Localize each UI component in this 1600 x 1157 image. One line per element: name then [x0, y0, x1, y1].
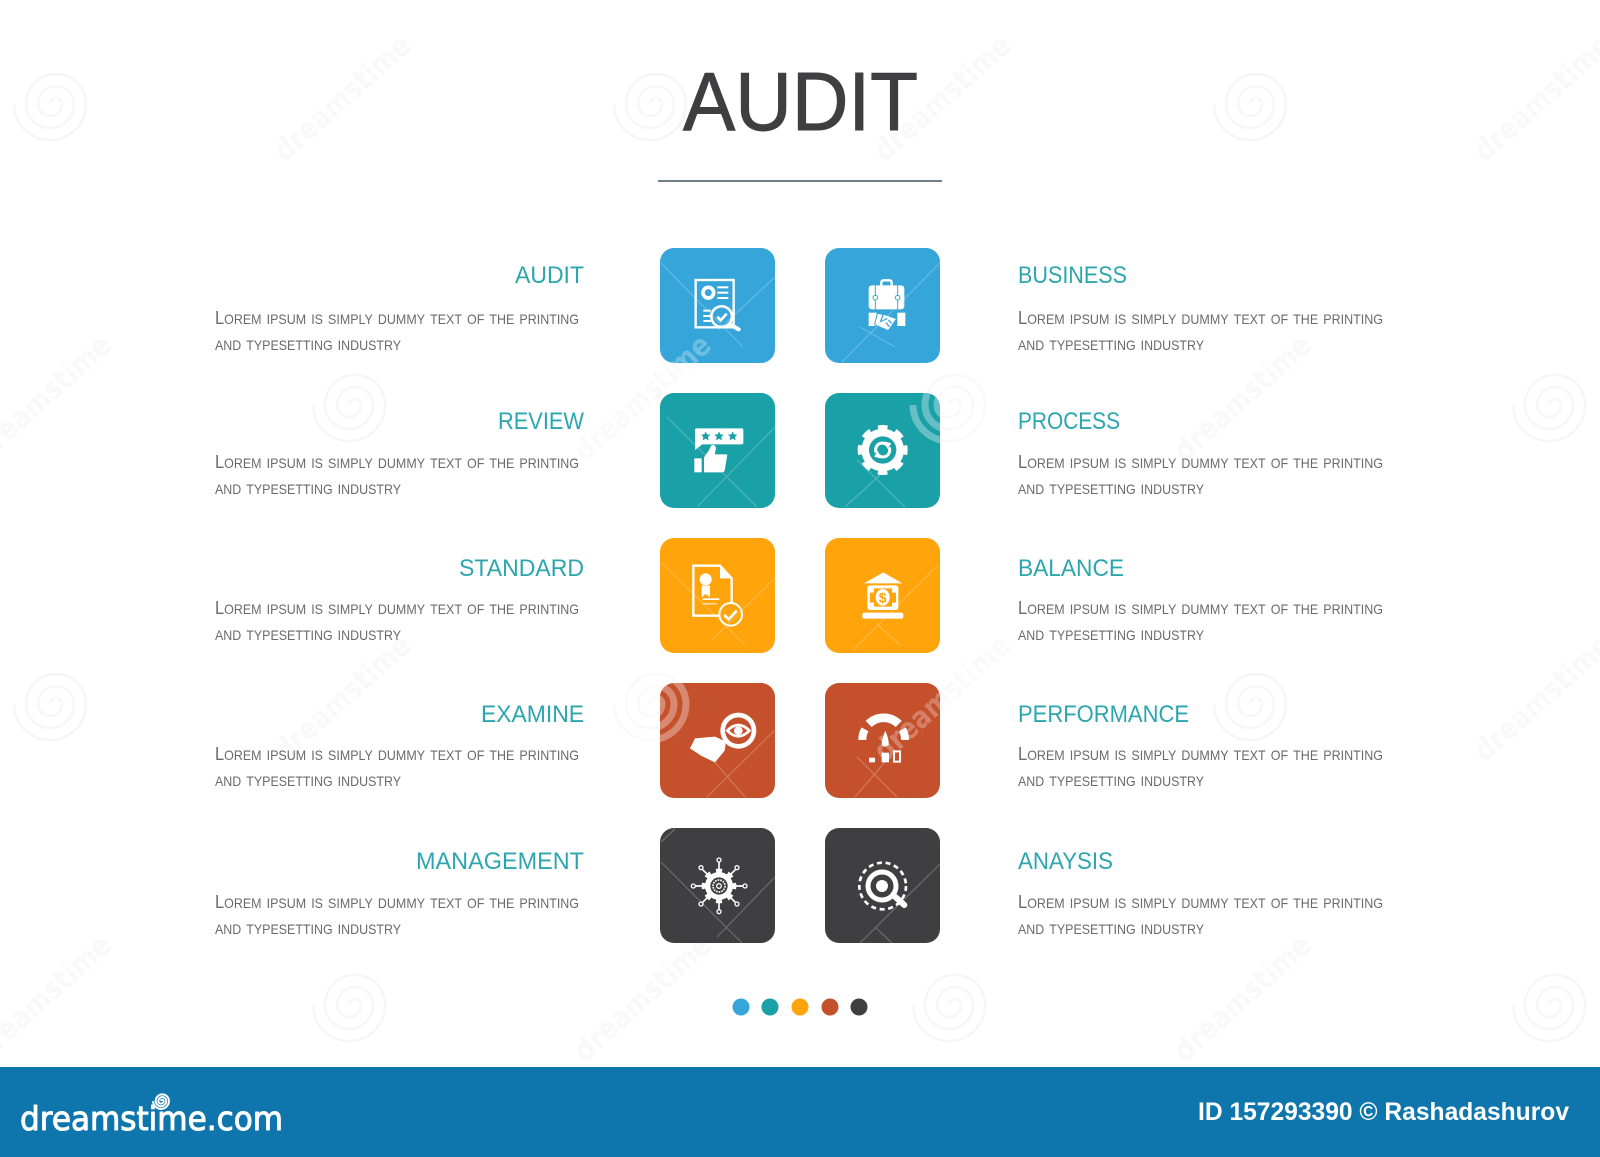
panel: examine	[215, 683, 775, 798]
icon: document with magnifier	[696, 280, 739, 329]
tile: management	[660, 828, 775, 943]
tile: business	[825, 248, 940, 363]
tile: balance	[825, 538, 940, 653]
text block: balance	[1018, 596, 1383, 645]
icon: briefcase and handshake	[869, 280, 905, 331]
text block: performance	[1018, 742, 1383, 791]
pagination dots	[732, 998, 868, 1016]
text block: performance: and typesetting industry	[1018, 768, 1205, 791]
text block: anaysis: and typesetting industry	[1018, 916, 1205, 939]
text block: management: and typesetting industry	[215, 916, 402, 939]
icon: hand holding eye lens	[690, 713, 756, 762]
text block: audit: Lorem ipsum is simply dummy text of the printing	[215, 306, 579, 329]
panel: business	[825, 248, 1383, 363]
icon: network gear	[691, 858, 747, 914]
text block: examine: Lorem ipsum is simply dummy text of the printing	[215, 742, 579, 765]
heading: examine: EXAMINE	[481, 701, 584, 728]
heading: performance: PERFORMANCE	[1018, 701, 1189, 728]
panel: audit	[215, 248, 775, 363]
icon: magnifier with dashed circle	[859, 863, 906, 909]
heading: audit: AUDIT	[515, 262, 584, 289]
text block: review: Lorem ipsum is simply dummy text of the printing	[215, 450, 579, 473]
text: dreamstime	[567, 328, 718, 469]
text block: examine	[215, 742, 579, 791]
title: AUDIT	[683, 55, 918, 148]
text block: review: and typesetting industry	[215, 476, 402, 499]
text block: audit	[215, 306, 579, 355]
text block: process: and typesetting industry	[1018, 476, 1205, 499]
text: dreamstime	[867, 28, 1018, 169]
text block: standard	[215, 596, 579, 645]
heading: management: MANAGEMENT	[416, 848, 584, 875]
text block: management: Lorem ipsum is simply dummy text of the printing	[215, 890, 579, 913]
text block: review	[215, 450, 579, 499]
panel: performance	[825, 683, 1383, 798]
text block: process: Lorem ipsum is simply dummy text of the printing	[1018, 450, 1383, 473]
tile: audit	[660, 248, 775, 363]
tile: anaysis	[825, 828, 940, 943]
text block: standard: and typesetting industry	[215, 622, 402, 645]
text: dreamstime	[1167, 928, 1318, 1069]
text: dreamstime	[267, 628, 418, 769]
text: dreamstime	[267, 28, 418, 169]
text block: process	[1018, 450, 1383, 499]
text block: business: Lorem ipsum is simply dummy text of the printing	[1018, 306, 1383, 329]
icon: star rating and thumb up	[694, 428, 743, 472]
text: dreamstime	[1167, 328, 1318, 469]
text: dreamstime	[567, 928, 718, 1069]
panel: anaysis	[825, 828, 1383, 943]
text: dreamstime	[867, 628, 1018, 769]
text block: audit: and typesetting industry	[215, 332, 402, 355]
tile: examine	[660, 683, 775, 798]
tile: standard	[660, 538, 775, 653]
panel: management	[215, 828, 775, 943]
tile: review	[660, 393, 775, 508]
footer banner	[0, 1067, 1600, 1157]
heading: review: REVIEW	[498, 408, 585, 435]
text block: examine: and typesetting industry	[215, 768, 402, 791]
text block: management	[215, 890, 579, 939]
heading: anaysis: ANAYSIS	[1018, 848, 1113, 875]
text block: balance: and typesetting industry	[1018, 622, 1205, 645]
image id and credit: ID 157293390 © Rashadashurov	[1198, 1098, 1569, 1126]
panel: review	[215, 393, 775, 508]
icon: bank with dollar bill: $	[879, 589, 887, 605]
text block: anaysis: Lorem ipsum is simply dummy text of the printing	[1018, 890, 1383, 913]
heading: business: BUSINESS	[1018, 262, 1127, 289]
icon: gear with refresh arrows	[860, 428, 905, 472]
text block: business: and typesetting industry	[1018, 332, 1205, 355]
heading: process: PROCESS	[1018, 408, 1120, 435]
logo: dreamstime.com: dreamstime.com	[20, 1099, 283, 1138]
text block: standard: Lorem ipsum is simply dummy text of the printing	[215, 596, 579, 619]
text block: balance: Lorem ipsum is simply dummy text of the printing	[1018, 596, 1383, 619]
tile: performance	[825, 683, 940, 798]
text block: anaysis	[1018, 890, 1383, 939]
panel: standard	[215, 538, 775, 653]
text: dreamstime	[867, 628, 1018, 769]
tile: process	[825, 393, 940, 508]
text block: performance: Lorem ipsum is simply dummy text of the printing	[1018, 742, 1383, 765]
panel: balance	[825, 538, 1383, 653]
heading: balance: BALANCE	[1018, 555, 1124, 582]
text: dreamstime	[567, 328, 718, 469]
icon: gauge with bars	[862, 718, 905, 762]
text block: business	[1018, 306, 1383, 355]
panel: process	[825, 393, 1383, 508]
icon: certificate with check mark	[693, 566, 742, 626]
heading: standard: STANDARD	[459, 555, 584, 582]
